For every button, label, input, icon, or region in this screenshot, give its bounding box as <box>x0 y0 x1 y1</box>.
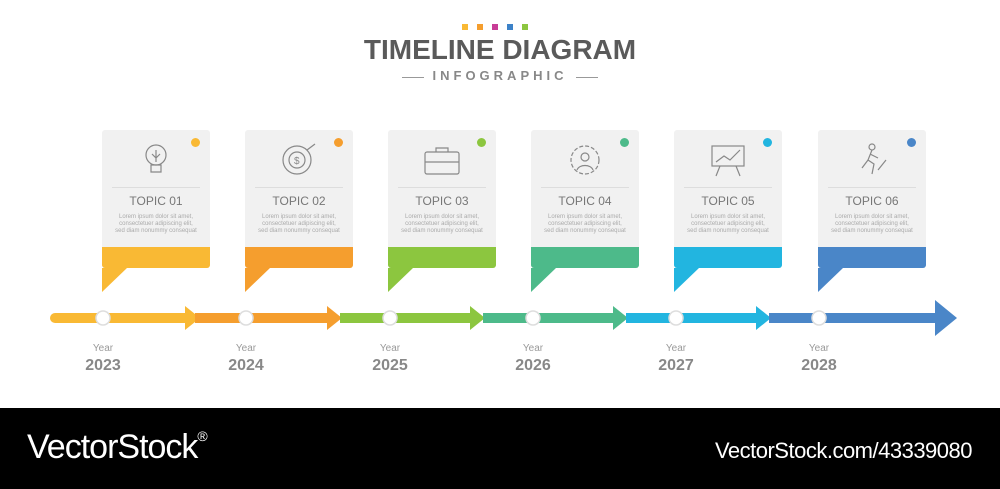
card 5: Lorem ipsum dolor sit amet, <box>691 214 765 220</box>
year 2024: Year <box>236 343 256 354</box>
footer bar <box>0 408 1000 489</box>
card 4 <box>531 130 639 268</box>
subtitle: INFOGRAPHIC <box>432 68 568 83</box>
year 2028: 2028 <box>801 357 837 374</box>
card 5: consectetuer adipiscing elit, <box>691 221 765 227</box>
card 4: consectetuer adipiscing elit, <box>548 221 622 227</box>
year 2027: Year <box>666 343 686 354</box>
year 2026: Year <box>523 343 543 354</box>
year 2026 <box>515 343 551 374</box>
card 1: consectetuer adipiscing elit, <box>119 221 193 227</box>
card 3: Lorem ipsum dolor sit amet, <box>405 214 479 220</box>
timeline arrow <box>50 300 957 336</box>
card 5: TOPIC 05 <box>701 194 755 208</box>
year 2027: 2027 <box>658 357 694 374</box>
card 4: Lorem ipsum dolor sit amet, <box>548 214 622 220</box>
year 2025: 2025 <box>372 357 408 374</box>
card 2: sed diam nonummy consequat <box>258 228 340 234</box>
card 2 <box>245 130 353 268</box>
card 2: consectetuer adipiscing elit, <box>262 221 336 227</box>
card 5 <box>674 130 782 268</box>
year 2023: 2023 <box>85 357 121 374</box>
year 2023: Year <box>93 343 113 354</box>
year 2026: 2026 <box>515 357 551 374</box>
card 6: consectetuer adipiscing elit, <box>835 221 909 227</box>
year 2023 <box>85 343 121 374</box>
year 2028: Year <box>809 343 829 354</box>
tail 4 <box>531 268 556 292</box>
card 6: TOPIC 06 <box>845 194 899 208</box>
card 6: Lorem ipsum dolor sit amet, <box>835 214 909 220</box>
color squares <box>462 24 528 30</box>
year 2027 <box>658 343 694 374</box>
card 2: $ <box>294 156 300 167</box>
card 3: consectetuer adipiscing elit, <box>405 221 479 227</box>
year 2024 <box>228 343 264 374</box>
card 1: TOPIC 01 <box>129 194 183 208</box>
card 1: Lorem ipsum dolor sit amet, <box>119 214 193 220</box>
tail 2 <box>245 268 270 292</box>
tail 3 <box>388 268 413 292</box>
tail 5 <box>674 268 699 292</box>
card 2: TOPIC 02 <box>272 194 326 208</box>
card 5: sed diam nonummy consequat <box>687 228 769 234</box>
card 3: sed diam nonummy consequat <box>401 228 483 234</box>
title: TIMELINE DIAGRAM <box>364 34 636 65</box>
card 6 <box>818 130 926 268</box>
footer bar: VectorStock.com/43339080 <box>715 438 972 463</box>
tail 1 <box>102 268 127 292</box>
year 2024: 2024 <box>228 357 264 374</box>
year 2025 <box>372 343 408 374</box>
tail 6 <box>818 268 843 292</box>
card 3 <box>388 130 496 268</box>
year 2025: Year <box>380 343 400 354</box>
card 2: Lorem ipsum dolor sit amet, <box>262 214 336 220</box>
card 4: sed diam nonummy consequat <box>544 228 626 234</box>
footer bar: VectorStock® <box>27 428 207 466</box>
card 6: sed diam nonummy consequat <box>831 228 913 234</box>
card 1: sed diam nonummy consequat <box>115 228 197 234</box>
card 4: TOPIC 04 <box>558 194 612 208</box>
card 3: TOPIC 03 <box>415 194 469 208</box>
year 2028 <box>801 343 837 374</box>
card 1 <box>102 130 210 268</box>
